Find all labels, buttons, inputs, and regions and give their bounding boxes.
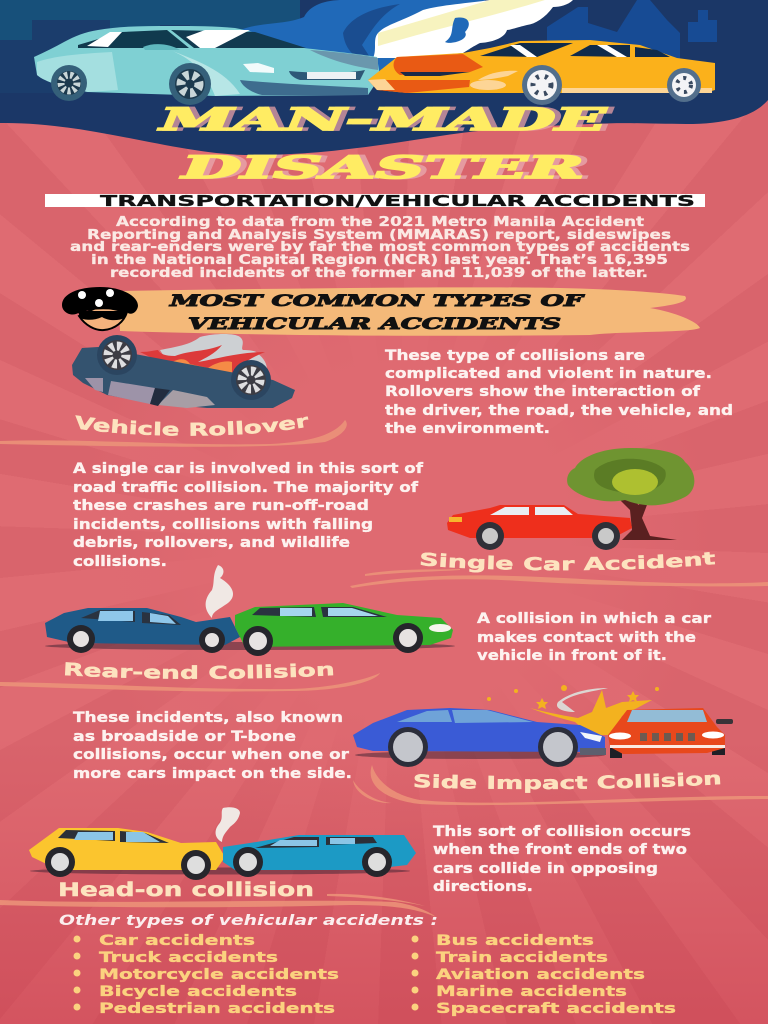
text: rollover description: These type of collisions are (385, 348, 645, 364)
illustration: overturned car with fire (72, 334, 295, 408)
label: vehicle rollover (0, 415, 347, 447)
text: rollover description: complicated and violent in nature. (385, 366, 712, 382)
text: side impact description: more cars impact on the side. (73, 766, 352, 782)
header banner (0, 0, 768, 155)
wheels (51, 65, 87, 101)
text: single car description: road traffic collision. The majority of (73, 480, 419, 496)
list: other types right column: Train accidents (436, 949, 608, 966)
wheels (97, 335, 137, 375)
text: rollover description: Rollovers show the interaction of (385, 384, 701, 400)
title: MAN-MADE (158, 102, 607, 138)
subtitle bar (45, 192, 705, 210)
icon: helmet head with sunglasses (62, 287, 138, 330)
heading brush banner (118, 287, 700, 336)
wheels (388, 727, 428, 767)
text: head-on description: cars collide in opposing (433, 861, 658, 877)
text: side impact description: collisions, occur when one or (73, 747, 349, 763)
intro paragraph: recorded incidents of the former and 11,039 of the latter. (110, 266, 648, 281)
heading: other types: Other types of vehicular accidents : (59, 913, 438, 929)
intro paragraph (70, 215, 690, 281)
text: rear-end description: A collision in which a car (477, 611, 711, 627)
wheels (522, 65, 562, 105)
skyline: right (547, 0, 680, 60)
text: rear-end description: makes contact with the (477, 630, 696, 646)
text: single car description: these crashes are run-off-road (73, 498, 369, 514)
text: side impact description: as broadside or T-bone (73, 729, 296, 745)
list: other types right column: Bus accidents (436, 932, 594, 949)
text: rollover description (385, 348, 733, 437)
text: single car description (73, 461, 424, 570)
skyline: left (0, 0, 300, 93)
list: other types right column (412, 932, 676, 1017)
intro paragraph: in the National Capital Region (NCR) last year. That’s 16,395 (91, 253, 668, 268)
list: other types right column: Spacecraft accidents (436, 1000, 676, 1017)
title (158, 102, 613, 186)
heading brush banner: MOST COMMON TYPES OF (168, 291, 586, 310)
text: rear-end description: vehicle in front of it. (477, 648, 667, 664)
intro paragraph: According to data from the 2021 Metro Manila Accident (116, 215, 644, 230)
label: single car accident: Single Car Accident (420, 552, 716, 572)
wheels (45, 847, 75, 877)
text: single car description: collisions. (73, 554, 167, 570)
label: side impact collision: Side Impact Collision (414, 772, 720, 793)
illustration: side impact collision (353, 685, 733, 767)
text: head-on description (433, 824, 691, 895)
illustration: rear-end collision (45, 565, 455, 656)
label: single car accident (350, 552, 768, 588)
text: rear-end description (477, 611, 711, 664)
list: other types left column: Pedestrian accidents (99, 1000, 335, 1017)
label: vehicle rollover: Vehicle Rollover (75, 415, 308, 436)
intro paragraph: and rear-enders were by far the most common types of accidents (70, 240, 690, 255)
list: other types right column: Marine accidents (436, 983, 627, 1000)
blue smoke (240, 0, 485, 93)
text: single car description: incidents, collisions with falling (73, 517, 373, 533)
list: other types left column (74, 932, 339, 1017)
title: MAN-MADE (164, 102, 613, 138)
car: orange sedan (368, 40, 715, 105)
wheels (476, 522, 504, 550)
label: rear-end collision (0, 662, 380, 692)
text: head-on description: This sort of collision occurs (433, 824, 691, 840)
car body (72, 347, 295, 408)
label: head-on collision: Head-on collision (58, 880, 314, 901)
label: side impact collision (353, 766, 768, 806)
list: other types left column: Motorcycle accidents (99, 966, 339, 983)
illustration: head-on collision (29, 807, 416, 880)
list: other types left column: Truck accidents (99, 949, 278, 966)
text: single car description: debris, rollovers, and wildlife (73, 535, 350, 551)
text: rollover description: the driver, the road, the vehicle, and (385, 403, 733, 419)
explosion (530, 690, 652, 735)
smoke (160, 334, 267, 376)
intro paragraph: Reporting and Analysis System (MMARAS) report, sideswipes (87, 228, 671, 243)
text: side impact description: These incidents, also known (73, 710, 343, 726)
title: DISASTER (180, 150, 584, 186)
title: DISASTER (186, 150, 590, 186)
list: other types left column: Car accidents (99, 932, 255, 949)
car: teal hatchback (34, 26, 380, 105)
label: head-on collision (0, 880, 436, 917)
heading brush banner: VEHICULAR ACCIDENTS (188, 314, 561, 333)
text: single car description: A single car is involved in this sort of (73, 461, 424, 477)
smoke (216, 807, 240, 842)
text: head-on description: when the front ends of two (433, 842, 687, 858)
wheels (67, 625, 95, 653)
smoke (206, 565, 233, 618)
list: other types left column: Bicycle accidents (99, 983, 297, 1000)
illustration: car hitting tree (447, 448, 694, 550)
white smoke (372, 0, 573, 60)
text: head-on description: directions. (433, 879, 533, 895)
flames (140, 345, 265, 375)
label: rear-end collision: Rear-end Collision (64, 662, 334, 680)
text: side impact description (73, 710, 352, 782)
text: rollover description: the environment. (385, 421, 550, 437)
list: other types right column: Aviation accidents (436, 966, 645, 983)
subtitle bar: TRANSPORTATION/VEHICULAR ACCIDENTS (100, 192, 695, 210)
